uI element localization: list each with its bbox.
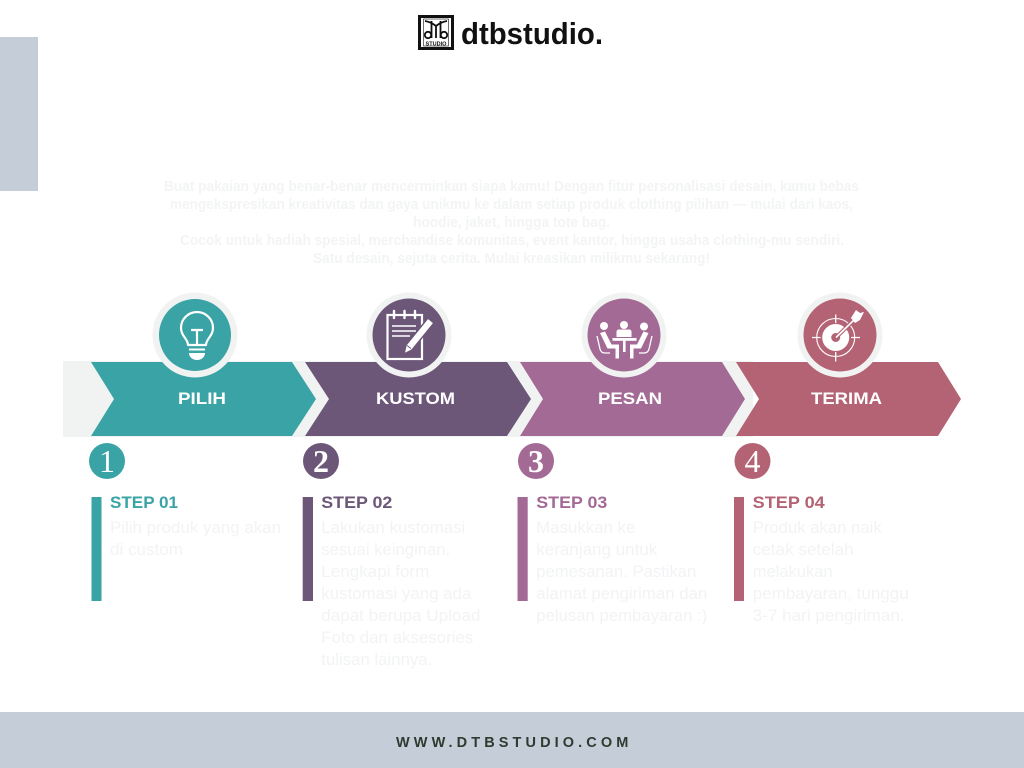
step 1 (89, 443, 281, 601)
number badge 2: 2 (313, 443, 329, 479)
band backing (63, 361, 753, 437)
number badge 4 (734, 443, 770, 479)
step 3 body (536, 518, 707, 625)
step 1 title: STEP 01 (110, 493, 178, 512)
step 2 title: STEP 02 (321, 493, 392, 512)
description text block: Satu desain, sejuta cerita. Mulai kreasikan milikmu sekarang! (313, 250, 710, 267)
step 3 body: pemesanan. Pastikan (536, 562, 696, 581)
chevron labels (178, 390, 882, 408)
icon: target with arrow (798, 292, 882, 378)
number badge 1 (89, 443, 125, 479)
number badge 3: 3 (528, 443, 544, 479)
step 4 title: STEP 04 (753, 493, 825, 512)
step 4 body (753, 518, 909, 625)
step 1 body: di custom (110, 540, 183, 559)
step 2 body (321, 518, 480, 669)
chevron process band (63, 361, 961, 437)
chevron labels: TERIMA (811, 390, 882, 408)
chevron labels: KUSTOM (376, 390, 455, 408)
number badge 4: 4 (744, 443, 760, 479)
corner accent block (0, 37, 38, 191)
step 2 body: kustomasi yang ada (321, 584, 472, 603)
accent bar 4 (734, 497, 744, 601)
chevron 1: teal (91, 362, 316, 436)
step 1 body (110, 518, 281, 559)
description text block: Buat pakaian yang benar-benar mencerminkan siapa kamu! Dengan fitur personalisasi desain, kamu bebas (164, 178, 859, 195)
step 3 body: keranjang untuk (536, 540, 658, 559)
description text block (164, 178, 859, 267)
footer url: WWW.DTBSTUDIO.COM (396, 735, 632, 751)
logo: STUDIO (426, 42, 447, 48)
icon: notepad and pencil (366, 292, 452, 378)
accent bar 2 (303, 497, 313, 601)
step 3 body: pelusan pembayaran :) (536, 606, 707, 625)
step 3 body: Masukkan ke (536, 518, 635, 537)
step 2 body: Lakukan kustomasi (321, 518, 465, 537)
step 2 body: sesuai keinginan. (321, 540, 450, 559)
chevron 4: rose (736, 362, 961, 436)
description text block: Cocok untuk hadiah spesial, merchandise komunitas, event kantor, hingga usaha clothing-mu sendiri. (180, 232, 844, 249)
step 4 body: 3-7 hari pengiriman. (753, 606, 905, 625)
step 4 body: Produk akan naik (753, 518, 882, 537)
chevron 3: mauve (520, 362, 745, 436)
icon: light bulb (152, 292, 238, 378)
step 2 body: Foto dan aksesories (321, 628, 473, 647)
step 2 (303, 443, 480, 669)
number badge 3 (518, 443, 554, 479)
step 2 body: dapat berupa Upload (321, 606, 480, 625)
number badge 1: 1 (99, 443, 115, 479)
step 2 body: Lengkapi form (321, 562, 429, 581)
step 4 body: cetak setelah (753, 540, 854, 559)
description text block: hoodie, jaket, hingga tote bag. (413, 214, 610, 231)
icon: people around table (582, 292, 666, 378)
step 4 body: melakukan (753, 562, 833, 581)
chevron labels: PILIH (178, 390, 226, 408)
step 2 body: tulisan lainnya. (321, 650, 432, 669)
accent bar 3 (518, 497, 528, 601)
step 4 body: pembayaran, tunggu (753, 584, 909, 603)
step 1 body: Pilih produk yang akan (110, 518, 281, 537)
step 3 title: STEP 03 (536, 493, 607, 512)
step 3 (518, 443, 707, 625)
chevron labels: PESAN (598, 390, 662, 408)
logo: dtbstudio. (461, 16, 603, 51)
number badge 2 (303, 443, 339, 479)
step 3 body: alamat pengiriman dan (536, 584, 707, 603)
step 4 (734, 443, 909, 625)
chevron 2: purple (305, 362, 531, 436)
footer band (0, 712, 1024, 768)
description text block: mengekspresikan kreativitas dan gaya unikmu ke dalam setiap produk clothing pilihan — mulai dari kaos, (170, 196, 853, 213)
accent bar 1 (92, 497, 102, 601)
